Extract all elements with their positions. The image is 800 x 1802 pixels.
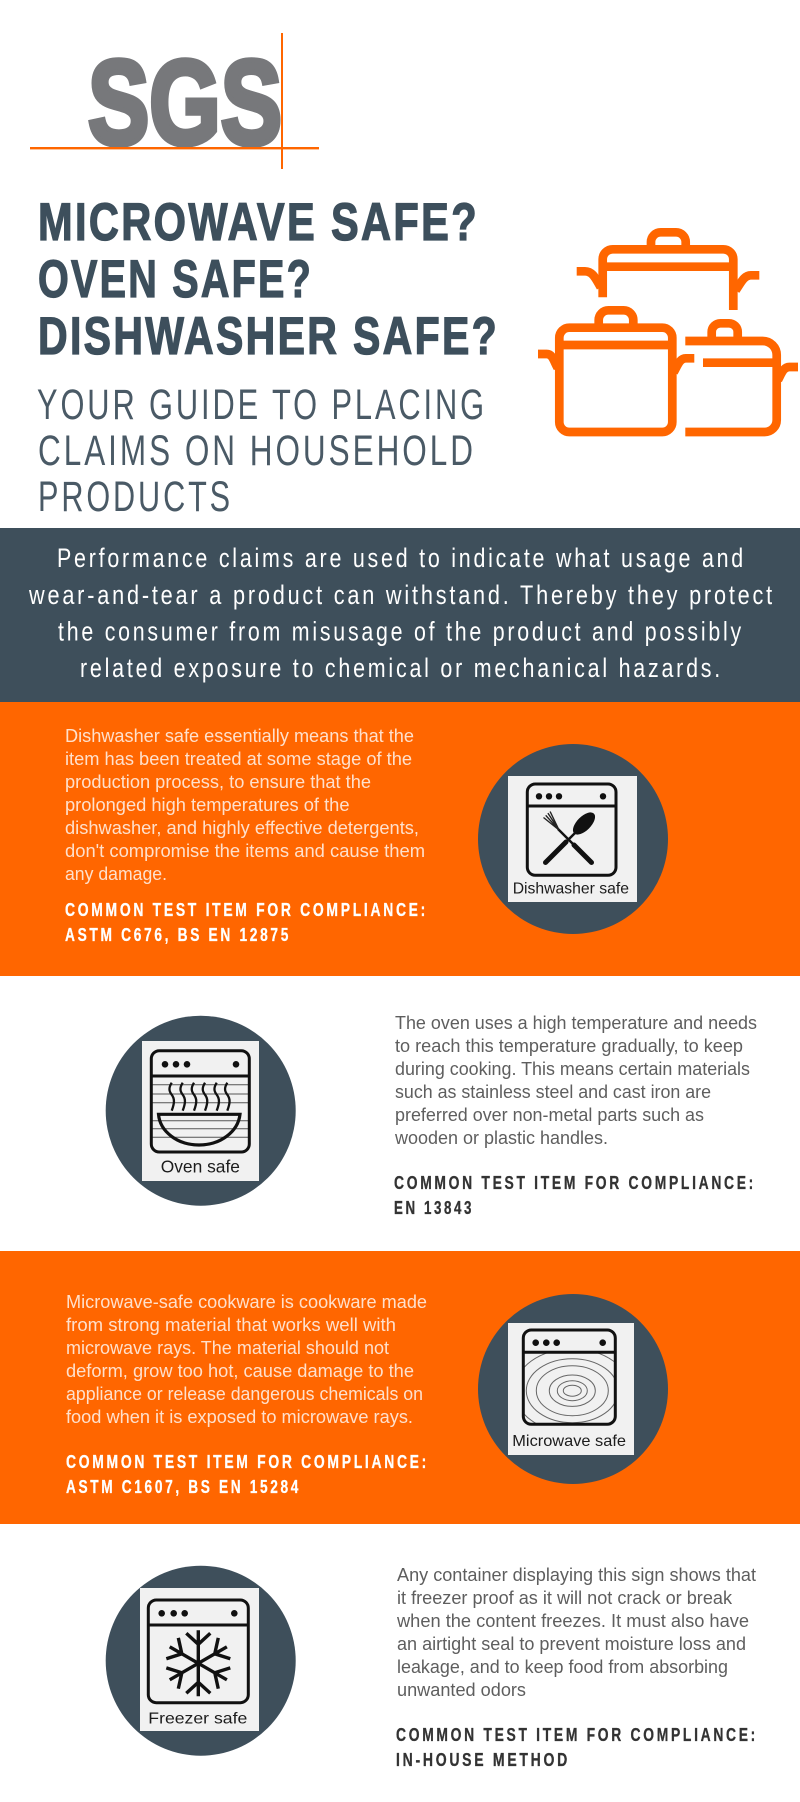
freezer description [396, 1565, 756, 1700]
microwave compliance: COMMON TEST ITEM FOR COMPLIANCE: [66, 1452, 429, 1472]
icon: microwave safe sign: Microwave safe [512, 1433, 626, 1450]
dishwasher description: dishwasher, and highly effective detergents, [65, 818, 419, 838]
panel: oven safe [106, 1013, 757, 1218]
panel: microwave safe [0, 1251, 800, 1524]
freezer description: unwanted odors [397, 1680, 526, 1700]
oven description: during cooking. This means certain materials [395, 1059, 750, 1079]
oven compliance: EN 13843 [394, 1198, 474, 1218]
dishwasher compliance: COMMON TEST ITEM FOR COMPLIANCE: [65, 900, 428, 920]
oven description: to reach this temperature gradually, to keep [395, 1036, 743, 1056]
microwave description: food when it is exposed to microwave rays. [66, 1407, 413, 1427]
logo: SGS: SGS [88, 36, 282, 170]
title: MICROWAVE SAFE? [38, 193, 479, 252]
subtitle: CLAIMS ON HOUSEHOLD [38, 428, 476, 475]
oven description: preferred over non-metal parts such as [395, 1105, 704, 1125]
oven compliance [394, 1173, 756, 1218]
microwave compliance [66, 1452, 429, 1497]
intro text [28, 543, 775, 683]
microwave description [66, 1292, 427, 1427]
oven description: The oven uses a high temperature and needs [395, 1013, 757, 1033]
panel: intro banner [0, 528, 800, 702]
freezer description: an airtight seal to prevent moisture loss and [397, 1634, 746, 1654]
freezer description: it freezer proof as it will not crack or break [397, 1588, 733, 1608]
icon: cooking pots [538, 232, 798, 432]
freezer compliance: IN-HOUSE METHOD [396, 1750, 570, 1770]
icon: oven safe sign [106, 1016, 296, 1206]
dishwasher compliance: ASTM C676, BS EN 12875 [65, 925, 291, 945]
subtitle [37, 382, 487, 521]
icon: freezer safe sign [106, 1566, 296, 1756]
subtitle: PRODUCTS [38, 474, 233, 521]
icon: microwave safe sign [478, 1294, 668, 1484]
dishwasher description: prolonged high temperatures of the [65, 795, 350, 815]
icon: dishwasher safe sign: Dishwasher safe [513, 880, 629, 897]
oven description: such as stainless steel and cast iron are [395, 1082, 711, 1102]
freezer description: Any container displaying this sign shows that [397, 1565, 756, 1585]
title: DISHWASHER SAFE? [38, 307, 499, 366]
panel: freezer safe [106, 1565, 758, 1770]
freezer compliance [396, 1725, 758, 1770]
dishwasher compliance [65, 900, 428, 945]
oven description: wooden or plastic handles. [394, 1128, 608, 1148]
freezer description: when the content freezes. It must also have [396, 1611, 749, 1631]
dishwasher description [65, 726, 425, 884]
freezer description: leakage, and to keep food from absorbing [397, 1657, 728, 1677]
dishwasher description: production process, to ensure that the [65, 772, 371, 792]
microwave description: Microwave-safe cookware is cookware made [66, 1292, 427, 1312]
microwave description: microwave rays. The material should not [66, 1338, 389, 1358]
panel: dishwasher safe [0, 702, 800, 976]
microwave description: deform, grow too hot, cause damage to the [66, 1361, 414, 1381]
microwave description: appliance or release dangerous chemicals on [66, 1384, 423, 1404]
dishwasher description: don't compromise the items and cause them [65, 841, 425, 861]
icon: freezer safe sign: Freezer safe [148, 1710, 247, 1727]
oven description [394, 1013, 757, 1148]
title: OVEN SAFE? [38, 250, 313, 309]
dishwasher description: Dishwasher safe essentially means that the [65, 726, 414, 746]
microwave compliance: ASTM C1607, BS EN 15284 [66, 1477, 301, 1497]
dishwasher description: any damage. [65, 864, 167, 884]
subtitle: YOUR GUIDE TO PLACING [37, 382, 487, 429]
icon: oven safe sign: Oven safe [161, 1157, 240, 1177]
icon: dishwasher safe sign [478, 744, 668, 934]
microwave description: from strong material that works well with [66, 1315, 396, 1335]
dishwasher description: item has been treated at some stage of the [65, 749, 412, 769]
title [38, 193, 499, 366]
